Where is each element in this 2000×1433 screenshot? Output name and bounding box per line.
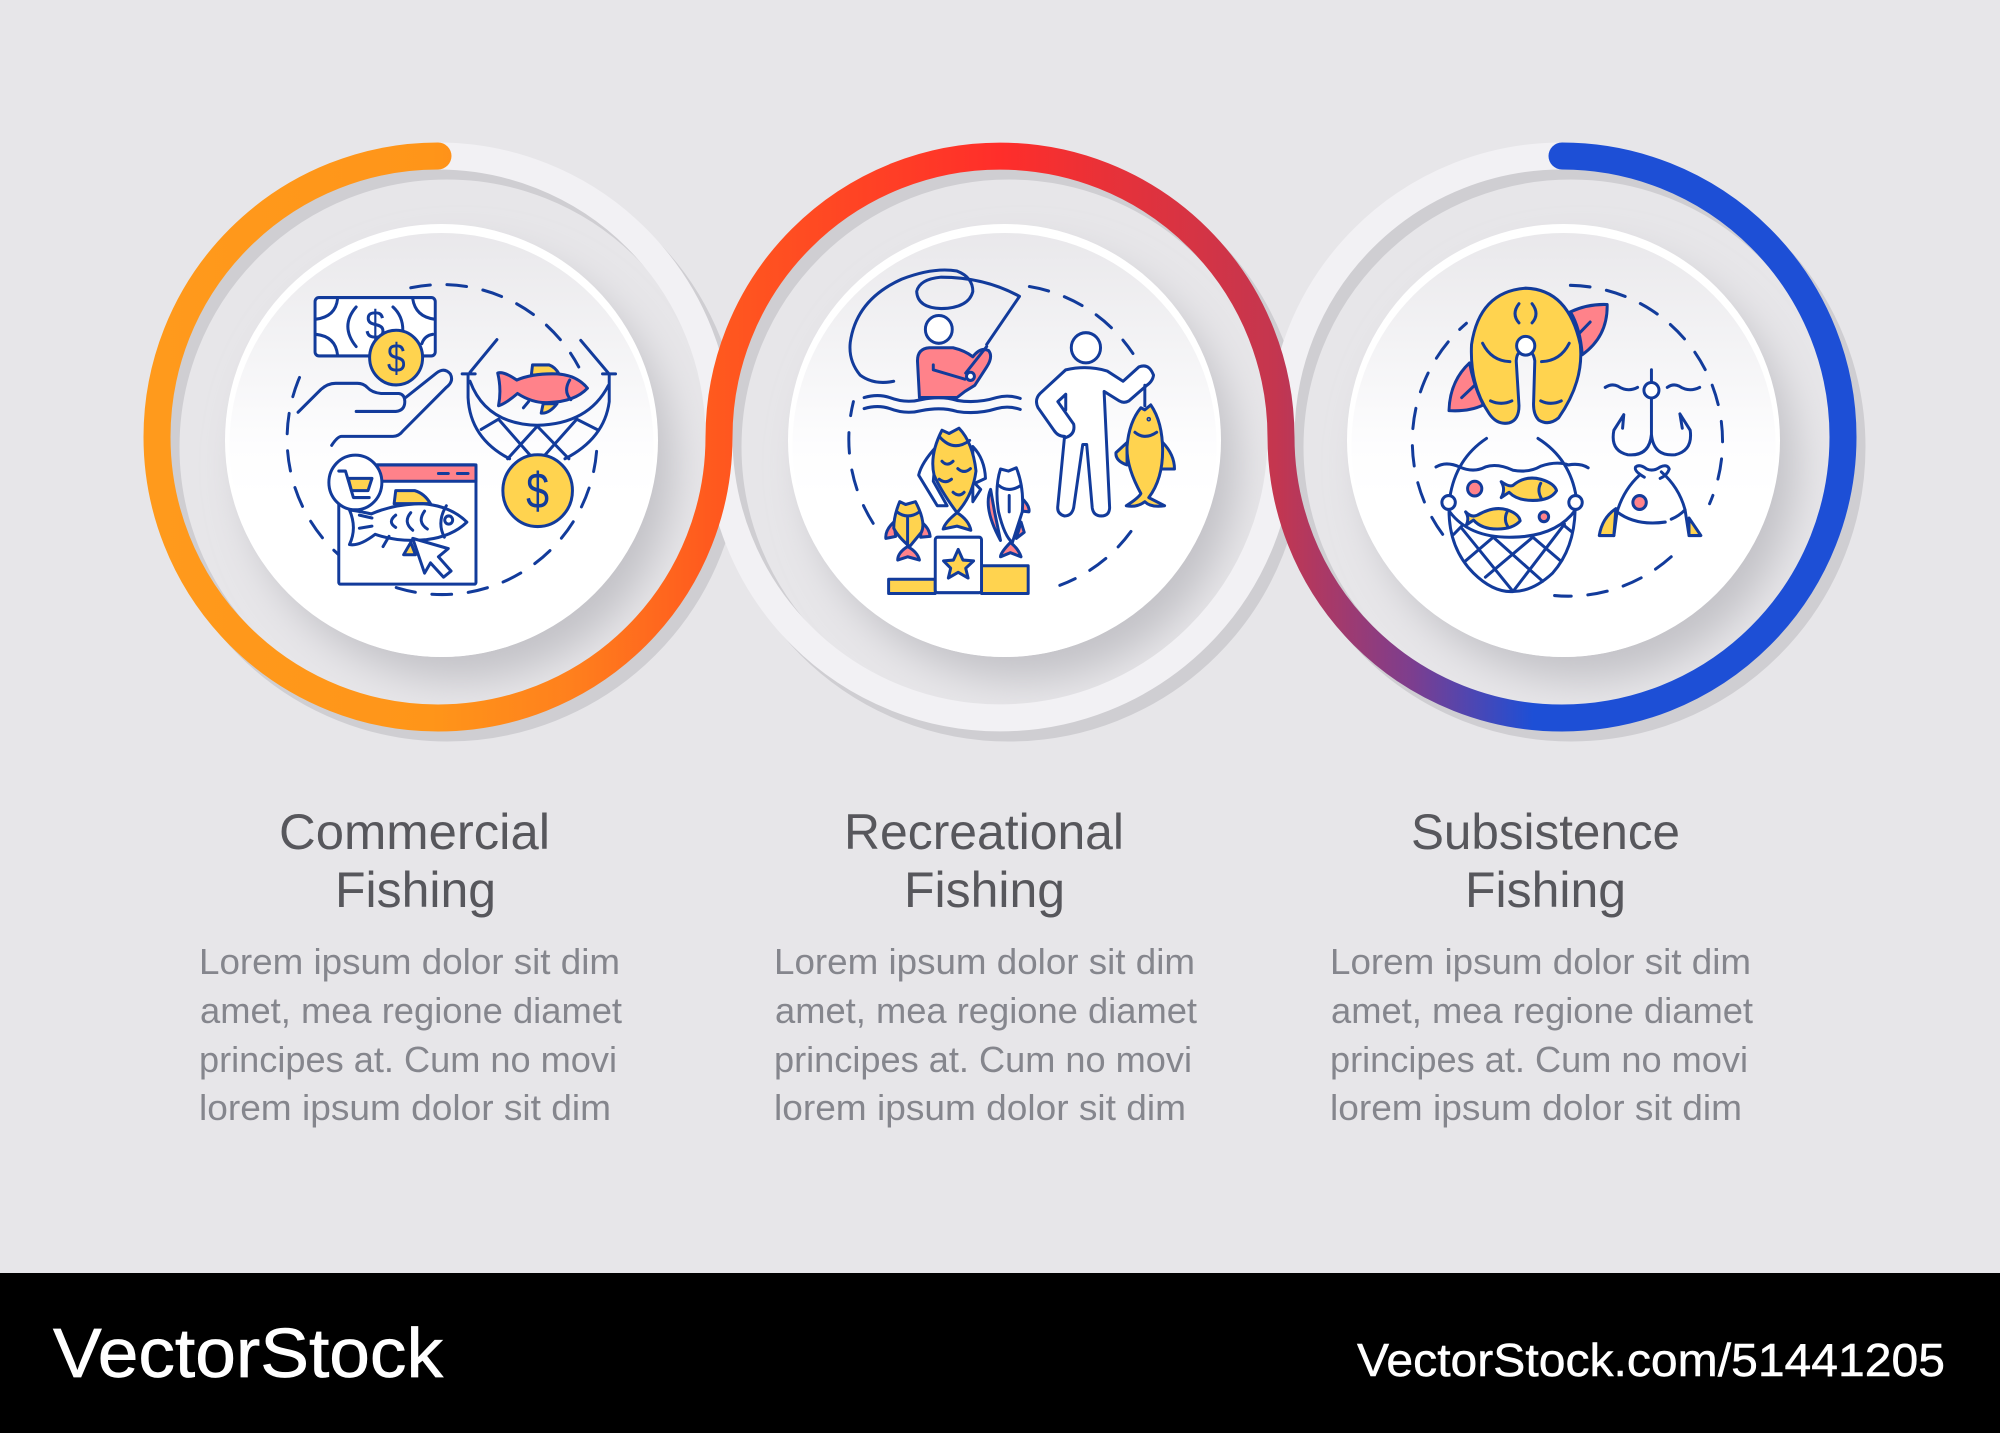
heading: subsistence fishing: Subsistence	[1411, 804, 1680, 860]
icon: recreational fishing	[849, 270, 1174, 594]
text block: recreational fishing: Lorem ipsum dolor sit dim	[774, 941, 1195, 982]
disk: recreational	[788, 224, 1221, 657]
text block: subsistence fishing: lorem ipsum dolor sit dim	[1330, 1087, 1742, 1128]
heading: recreational fishing: Recreational	[844, 804, 1124, 860]
gradient flowing ribbon	[157, 156, 1843, 718]
icon: online fish shop	[329, 455, 476, 584]
text block: commercial fishing: principes at. Cum no movi	[199, 1039, 617, 1080]
icon: open hand	[298, 370, 452, 445]
heading: recreational fishing: Fishing	[904, 862, 1065, 918]
icon: fish hook	[1605, 370, 1700, 455]
text block: recreational fishing: lorem ipsum dolor sit dim	[774, 1087, 1186, 1128]
text block: subsistence fishing: Lorem ipsum dolor sit dim	[1330, 941, 1751, 982]
icon: large coin	[503, 455, 572, 527]
text block: recreational fishing: principes at. Cum no movi	[774, 1039, 1192, 1080]
text block: commercial fishing: amet, mea regione diamet	[200, 990, 622, 1031]
soft disk shadows	[246, 252, 1796, 680]
icon: fish head	[1599, 466, 1701, 536]
icon: banknote and coin: $	[365, 303, 385, 348]
text block: commercial fishing: lorem ipsum dolor sit dim	[199, 1087, 611, 1128]
icon: person holding fish	[1036, 333, 1174, 516]
footer image id: VectorStock.com/51441205	[1357, 1334, 1945, 1386]
icon: net with fish	[462, 340, 616, 459]
heading: subsistence fishing: Fishing	[1465, 862, 1626, 918]
icon: banknote and coin	[315, 298, 435, 385]
ring shadows	[166, 166, 1852, 728]
footer bar	[0, 1273, 2000, 1433]
icon: angler with rod	[850, 270, 1020, 413]
text block: commercial fishing: Lorem ipsum dolor sit dim	[199, 941, 620, 982]
icon: trophy fish on podium	[886, 428, 1029, 594]
disk: subsistence	[1347, 224, 1780, 657]
disk: commercial	[225, 224, 658, 657]
text block: recreational fishing: amet, mea regione diamet	[775, 990, 1197, 1031]
icon: net with fish in water	[1436, 438, 1588, 592]
icon: subsistence fishing	[1412, 285, 1723, 596]
icon: commercial fishing	[287, 285, 616, 595]
text block: subsistence fishing: amet, mea regione diamet	[1331, 990, 1753, 1031]
pale ring track	[438, 156, 1562, 718]
heading: commercial fishing: Commercial	[279, 804, 550, 860]
heading: commercial fishing: Fishing	[335, 862, 496, 918]
icon: salmon steak	[1449, 288, 1607, 423]
text block: subsistence fishing: principes at. Cum no movi	[1330, 1039, 1748, 1080]
footer logo: VectorStock	[53, 1314, 444, 1392]
icon: banknote and coin: $	[387, 335, 406, 381]
icon: large coin: $	[526, 461, 549, 519]
